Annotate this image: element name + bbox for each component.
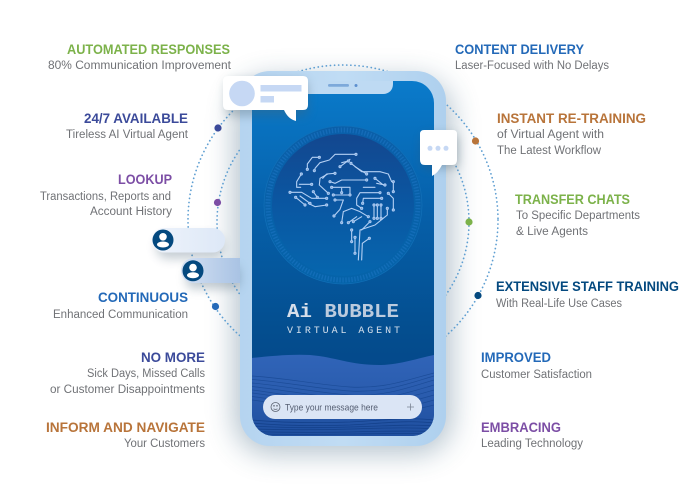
label: improved: Customer Satisfaction <box>481 369 592 381</box>
label: content delivery: Laser-Focused with No Delays <box>455 60 609 72</box>
label: lookup: LOOKUP <box>118 172 172 187</box>
phone speaker <box>328 84 358 87</box>
label: content delivery <box>455 42 609 72</box>
label: lookup: Transactions, Reports and <box>40 191 171 203</box>
phone body <box>240 71 446 446</box>
brand subtitle: VIRTUAL AGENT <box>287 326 400 337</box>
label: content delivery: CONTENT DELIVERY <box>455 42 584 57</box>
label: automated responses <box>48 42 232 72</box>
label: embracing <box>481 420 583 450</box>
label: improved <box>481 350 592 381</box>
dotted orbit arcs <box>188 65 498 375</box>
label: automated responses: AUTOMATED RESPONSES <box>67 42 230 57</box>
label: continuous <box>53 290 188 321</box>
brand title: Ai BUBBLE <box>287 301 399 323</box>
label: automated responses: 80% Communication Improvement <box>48 60 232 72</box>
brain disc <box>264 126 422 284</box>
label: instant re-training: The Latest Workflow <box>497 145 602 157</box>
label: lookup: Account History <box>90 206 172 218</box>
label: instant re-training <box>497 111 646 157</box>
chat bubble: profile <box>223 76 308 121</box>
icon: circuit brain <box>289 153 394 260</box>
label: inform and navigate <box>46 420 205 450</box>
label: extensive staff training <box>496 279 679 310</box>
label: embracing: Leading Technology <box>481 438 583 450</box>
label: transfer chats: & Live Agents <box>516 226 588 238</box>
label: 24/7 available <box>66 111 189 141</box>
phone notch <box>285 81 393 94</box>
label: continuous: CONTINUOUS <box>98 290 188 305</box>
label: continuous: Enhanced Communication <box>53 309 188 321</box>
label: extensive staff training: EXTENSIVE STAFF TRAINING <box>496 279 679 294</box>
label: no more <box>50 350 205 396</box>
chat bubble: typing <box>420 130 458 176</box>
user pill: top <box>152 228 225 259</box>
user pill: bottom <box>181 258 240 289</box>
label: transfer chats <box>515 192 640 238</box>
orbit marker dots <box>212 124 482 310</box>
label: improved: IMPROVED <box>481 350 551 365</box>
label: inform and navigate: INFORM AND NAVIGATE <box>46 420 205 435</box>
input placeholder: Type your message here <box>285 402 378 414</box>
label: no more: NO MORE <box>141 350 205 365</box>
label: inform and navigate: Your Customers <box>124 438 205 450</box>
message input <box>263 395 422 419</box>
label: embracing: EMBRACING <box>481 420 561 435</box>
label: instant re-training: INSTANT RE-TRAINING <box>497 111 646 126</box>
label: transfer chats: To Specific Departments <box>516 210 640 222</box>
phone <box>240 71 446 446</box>
label: no more: Sick Days, Missed Calls <box>87 368 205 380</box>
label: 24/7 available: 24/7 AVAILABLE <box>84 111 188 126</box>
icon: smiley <box>271 402 280 412</box>
label: extensive staff training: With Real-Life Use Cases <box>496 298 622 310</box>
label: 24/7 available: Tireless AI Virtual Agent <box>66 129 189 141</box>
label: lookup <box>40 172 172 218</box>
waves <box>252 355 434 436</box>
label: transfer chats: TRANSFER CHATS <box>515 192 630 207</box>
label: instant re-training: of Virtual Agent with <box>497 129 604 141</box>
label: no more: or Customer Disappointments <box>50 384 205 396</box>
icon: plus <box>407 404 414 410</box>
phone shadow <box>234 78 452 454</box>
phone screen <box>252 81 434 436</box>
